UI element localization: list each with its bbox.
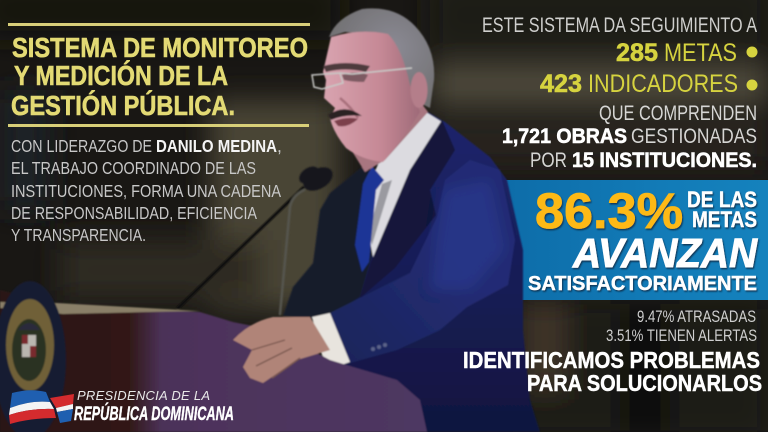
face — [323, 32, 420, 162]
works and institutions: 1,721 OBRAS — [502, 124, 627, 148]
avanzan: AVANZAN — [572, 230, 758, 276]
blue panel text — [528, 183, 758, 295]
neck — [350, 95, 428, 172]
shirt shadow strip — [369, 180, 392, 245]
glasses — [312, 68, 412, 89]
left title block — [8, 23, 310, 127]
86.3% figure: 86.3% — [535, 183, 683, 239]
title text: SISTEMA DE MONITOREO — [12, 32, 308, 63]
left description text: DANILO MEDINA — [156, 136, 277, 156]
logo line two: REPÚBLICA DOMINICANA — [74, 402, 234, 425]
de las metas: DE LAS — [687, 187, 757, 212]
podium seal — [0, 281, 66, 432]
microphone heads — [296, 162, 337, 196]
right lapel — [360, 120, 455, 298]
logo line one: PRESIDENCIA DE LA — [77, 388, 210, 403]
left description text: , — [277, 136, 282, 156]
eyebrow — [323, 63, 370, 72]
shirt cuff — [312, 313, 350, 368]
delayed and alert figures — [606, 307, 757, 345]
sleeve buttons — [371, 343, 387, 351]
icon: waving flag — [9, 390, 74, 424]
works and institutions — [502, 101, 757, 172]
285 metas — [616, 39, 758, 67]
title text — [11, 32, 308, 121]
blue statistic panel — [500, 180, 768, 300]
ear — [410, 72, 428, 108]
left description text: Y TRANSPARENCIA. — [11, 225, 146, 245]
left description text: INSTITUCIONES, FORMA UNA CADENA — [11, 181, 281, 201]
jacket torso and right side — [330, 112, 540, 432]
cheek fold — [340, 98, 358, 118]
closing statement — [463, 347, 762, 396]
423 indicadores: INDICADORES — [588, 70, 738, 98]
title bottom rule — [8, 124, 309, 127]
eye shadow — [342, 72, 368, 82]
logo: Presidencia de la República Dominicana — [9, 388, 234, 425]
title text: Y MEDICIÓN DE LA — [14, 60, 228, 91]
satisfactoriamente: SATISFACTORIAMENTE — [528, 273, 757, 295]
hand — [233, 317, 330, 383]
left description text: CON LIDERAZGO DE — [11, 136, 152, 156]
jacket left panel — [283, 166, 380, 320]
de las metas: METAS — [692, 207, 757, 232]
de las metas — [687, 187, 757, 232]
microphone stands — [178, 188, 304, 314]
shirt front — [362, 112, 442, 262]
tie — [355, 166, 384, 272]
hair — [329, 8, 434, 108]
podium body — [0, 290, 427, 432]
left description text — [11, 136, 282, 245]
left description text: EL TRABAJO COORDINADO DE LAS — [11, 158, 256, 178]
mouth — [334, 118, 358, 126]
works and institutions: POR — [530, 148, 567, 172]
photo: president at podium — [0, 8, 540, 432]
works and institutions: 15 INSTITUCIONES. — [572, 148, 757, 172]
285 metas: 285 — [616, 39, 658, 67]
right stats block — [482, 14, 758, 172]
sleeve highlight — [430, 180, 505, 290]
title text: GESTIÓN PÚBLICA. — [11, 90, 235, 121]
moustache — [328, 109, 362, 120]
title top rule — [8, 23, 310, 26]
sleeve — [330, 160, 515, 363]
left description text: DE RESPONSABILIDAD, EFICIENCIA — [11, 203, 257, 223]
285 metas: METAS — [664, 39, 737, 67]
423 indicadores: 423 — [540, 70, 582, 98]
podium top edge — [0, 302, 200, 314]
